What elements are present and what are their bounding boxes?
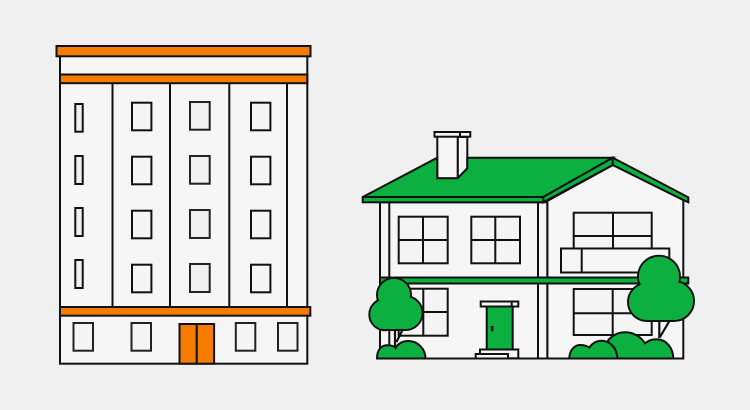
windows column four: [251, 103, 270, 292]
chimney: [434, 132, 470, 178]
left bush: [377, 341, 426, 358]
ground line: [377, 358, 683, 360]
balcony: [561, 248, 669, 272]
ground floor windows: [74, 323, 298, 351]
upper orange band: [60, 74, 307, 83]
windows column two: [132, 103, 151, 292]
lower left window: [399, 289, 448, 336]
entrance door: [180, 324, 214, 364]
front door: [481, 302, 518, 350]
door steps: [476, 350, 518, 358]
upper middle window: [471, 217, 520, 263]
right tree: [628, 256, 694, 338]
facade columns: [112, 83, 287, 307]
floor divider band: [380, 278, 688, 284]
building body: [60, 56, 307, 364]
roof cornice: [56, 46, 310, 56]
front wall: [380, 202, 547, 358]
house: [363, 132, 694, 358]
upper right window: [574, 213, 652, 249]
windows column three: [190, 102, 210, 292]
upper left window: [399, 217, 448, 263]
main roof: [363, 158, 613, 197]
right bushes: [569, 332, 673, 358]
lower orange band: [60, 307, 310, 316]
gable trim right: [613, 158, 688, 202]
apartment building: [56, 46, 310, 364]
narrow windows column: [75, 104, 83, 288]
lower right window: [574, 289, 652, 335]
gable trim left: [543, 158, 613, 202]
side wall and gable: [547, 165, 683, 358]
left tree: [369, 278, 422, 349]
wall corner lines: [389, 202, 538, 358]
front roof fascia: [363, 197, 543, 202]
